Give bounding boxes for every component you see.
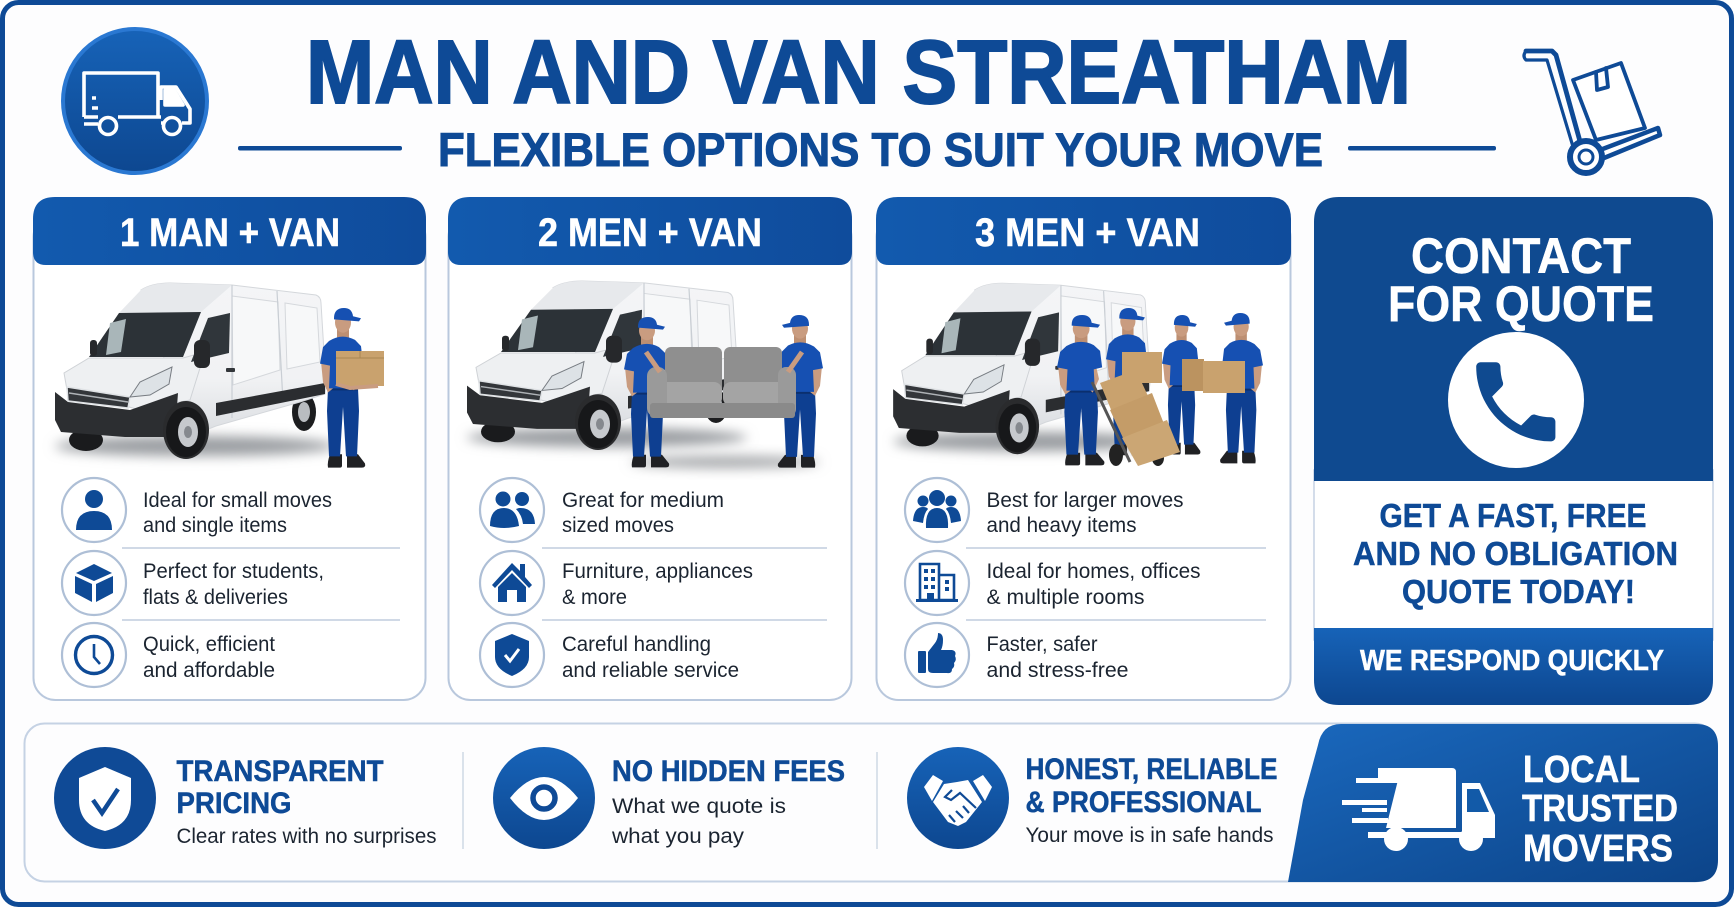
benefit: transparent pricing: PRICING: [176, 787, 292, 820]
benefit: honest, reliable and professional: Your move is in safe hands: [1026, 824, 1274, 847]
title: MAN AND VAN STREATHAM: [306, 23, 1411, 123]
contact heading block: [1314, 197, 1713, 481]
feature: faster and safer: Faster, safer: [986, 633, 1098, 656]
feature: careful handling: [480, 623, 739, 687]
we respond quickly banner: [1314, 628, 1713, 705]
local trusted movers badge: LOCAL: [1523, 749, 1640, 791]
icon: phone: [1448, 332, 1584, 468]
header truck badge: [63, 29, 207, 173]
heading: 2 men + van: [448, 197, 852, 265]
feature: faster and safer: and stress-free: [986, 659, 1128, 682]
heading: 1 man + van: 1 MAN + VAN: [120, 211, 340, 255]
quote message: GET A FAST, FREE: [1380, 497, 1646, 534]
panel: 3 men + van: [876, 197, 1291, 700]
feature: quick and affordable: and affordable: [143, 659, 275, 682]
photo: van with movers, hand truck and boxes: [893, 283, 1263, 466]
feature: larger moves: and heavy items: [986, 514, 1136, 537]
benefit: honest, reliable and professional: & PROFESSIONAL: [1026, 786, 1262, 819]
icon: hand truck with box: [1524, 51, 1660, 173]
feature: faster and safer: [905, 623, 1128, 687]
contact heading block: FOR QUOTE: [1388, 276, 1654, 332]
quote message: QUOTE TODAY!: [1402, 573, 1635, 610]
panel: 1 man + van: [33, 197, 426, 700]
feature: furniture and appliances: Furniture, appliances: [562, 560, 753, 583]
feature: medium moves: Great for medium: [562, 489, 724, 512]
feature: quick and affordable: [62, 623, 275, 687]
benefit: no hidden fees: NO HIDDEN FEES: [612, 755, 845, 788]
feature: medium moves: sized moves: [562, 514, 674, 537]
photo: van with one mover: [55, 283, 384, 468]
icon: delivery truck: [84, 73, 190, 134]
heading: 3 men + van: [876, 197, 1291, 265]
local trusted movers badge: [1288, 724, 1718, 882]
feature: students and deliveries: Perfect for students,: [143, 560, 324, 583]
benefit: transparent pricing: [54, 747, 436, 849]
quote message: AND NO OBLIGATION: [1353, 535, 1678, 572]
icon: fast truck: [1342, 768, 1495, 851]
heading: 3 men + van: 3 MEN + VAN: [975, 211, 1200, 255]
panel: contact for quote: [1314, 197, 1713, 705]
feature: larger moves: [905, 478, 1184, 542]
feature: students and deliveries: flats & deliveries: [143, 586, 288, 609]
feature: homes and offices: & multiple rooms: [986, 586, 1144, 609]
feature: larger moves: Best for larger moves: [986, 489, 1184, 512]
panel: 2 men + van: [448, 197, 852, 700]
feature: small moves: and single items: [143, 514, 287, 537]
feature: furniture and appliances: & more: [562, 586, 627, 609]
heading: 2 men + van: 2 MEN + VAN: [538, 211, 762, 255]
heading: 1 man + van: [33, 197, 426, 265]
feature: small moves: Ideal for small moves: [143, 489, 332, 512]
local trusted movers badge: TRUSTED: [1522, 788, 1678, 830]
benefit: no hidden fees: [493, 747, 845, 849]
feature: homes and offices: [905, 551, 1200, 615]
feature: quick and affordable: Quick, efficient: [143, 633, 275, 656]
feature: furniture and appliances: [480, 551, 753, 615]
feature: students and deliveries: [62, 551, 324, 615]
benefit: transparent pricing: Clear rates with no surprises: [176, 825, 436, 848]
benefit: transparent pricing: TRANSPARENT: [176, 755, 384, 788]
benefit: honest, reliable and professional: [907, 747, 1278, 849]
subtitle with rules: FLEXIBLE OPTIONS TO SUIT YOUR MOVE: [438, 123, 1323, 176]
contact heading block: CONTACT: [1411, 228, 1631, 284]
we respond quickly banner: WE RESPOND QUICKLY: [1360, 645, 1664, 677]
benefit: no hidden fees: what you pay: [611, 825, 745, 848]
panel: bottom benefits strip: [24, 724, 1718, 882]
quote message: [1353, 497, 1678, 610]
local trusted movers badge: MOVERS: [1523, 828, 1673, 870]
photo: van with two movers carrying sofa: [467, 281, 823, 468]
feature: medium moves: [480, 478, 724, 542]
feature: small moves: [62, 478, 332, 542]
benefit: no hidden fees: What we quote is: [612, 795, 786, 818]
feature: careful handling: Careful handling: [562, 633, 711, 656]
feature: homes and offices: Ideal for homes, offices: [986, 560, 1200, 583]
benefit: honest, reliable and professional: HONEST, RELIABLE: [1026, 753, 1278, 786]
feature: careful handling: and reliable service: [562, 659, 739, 682]
